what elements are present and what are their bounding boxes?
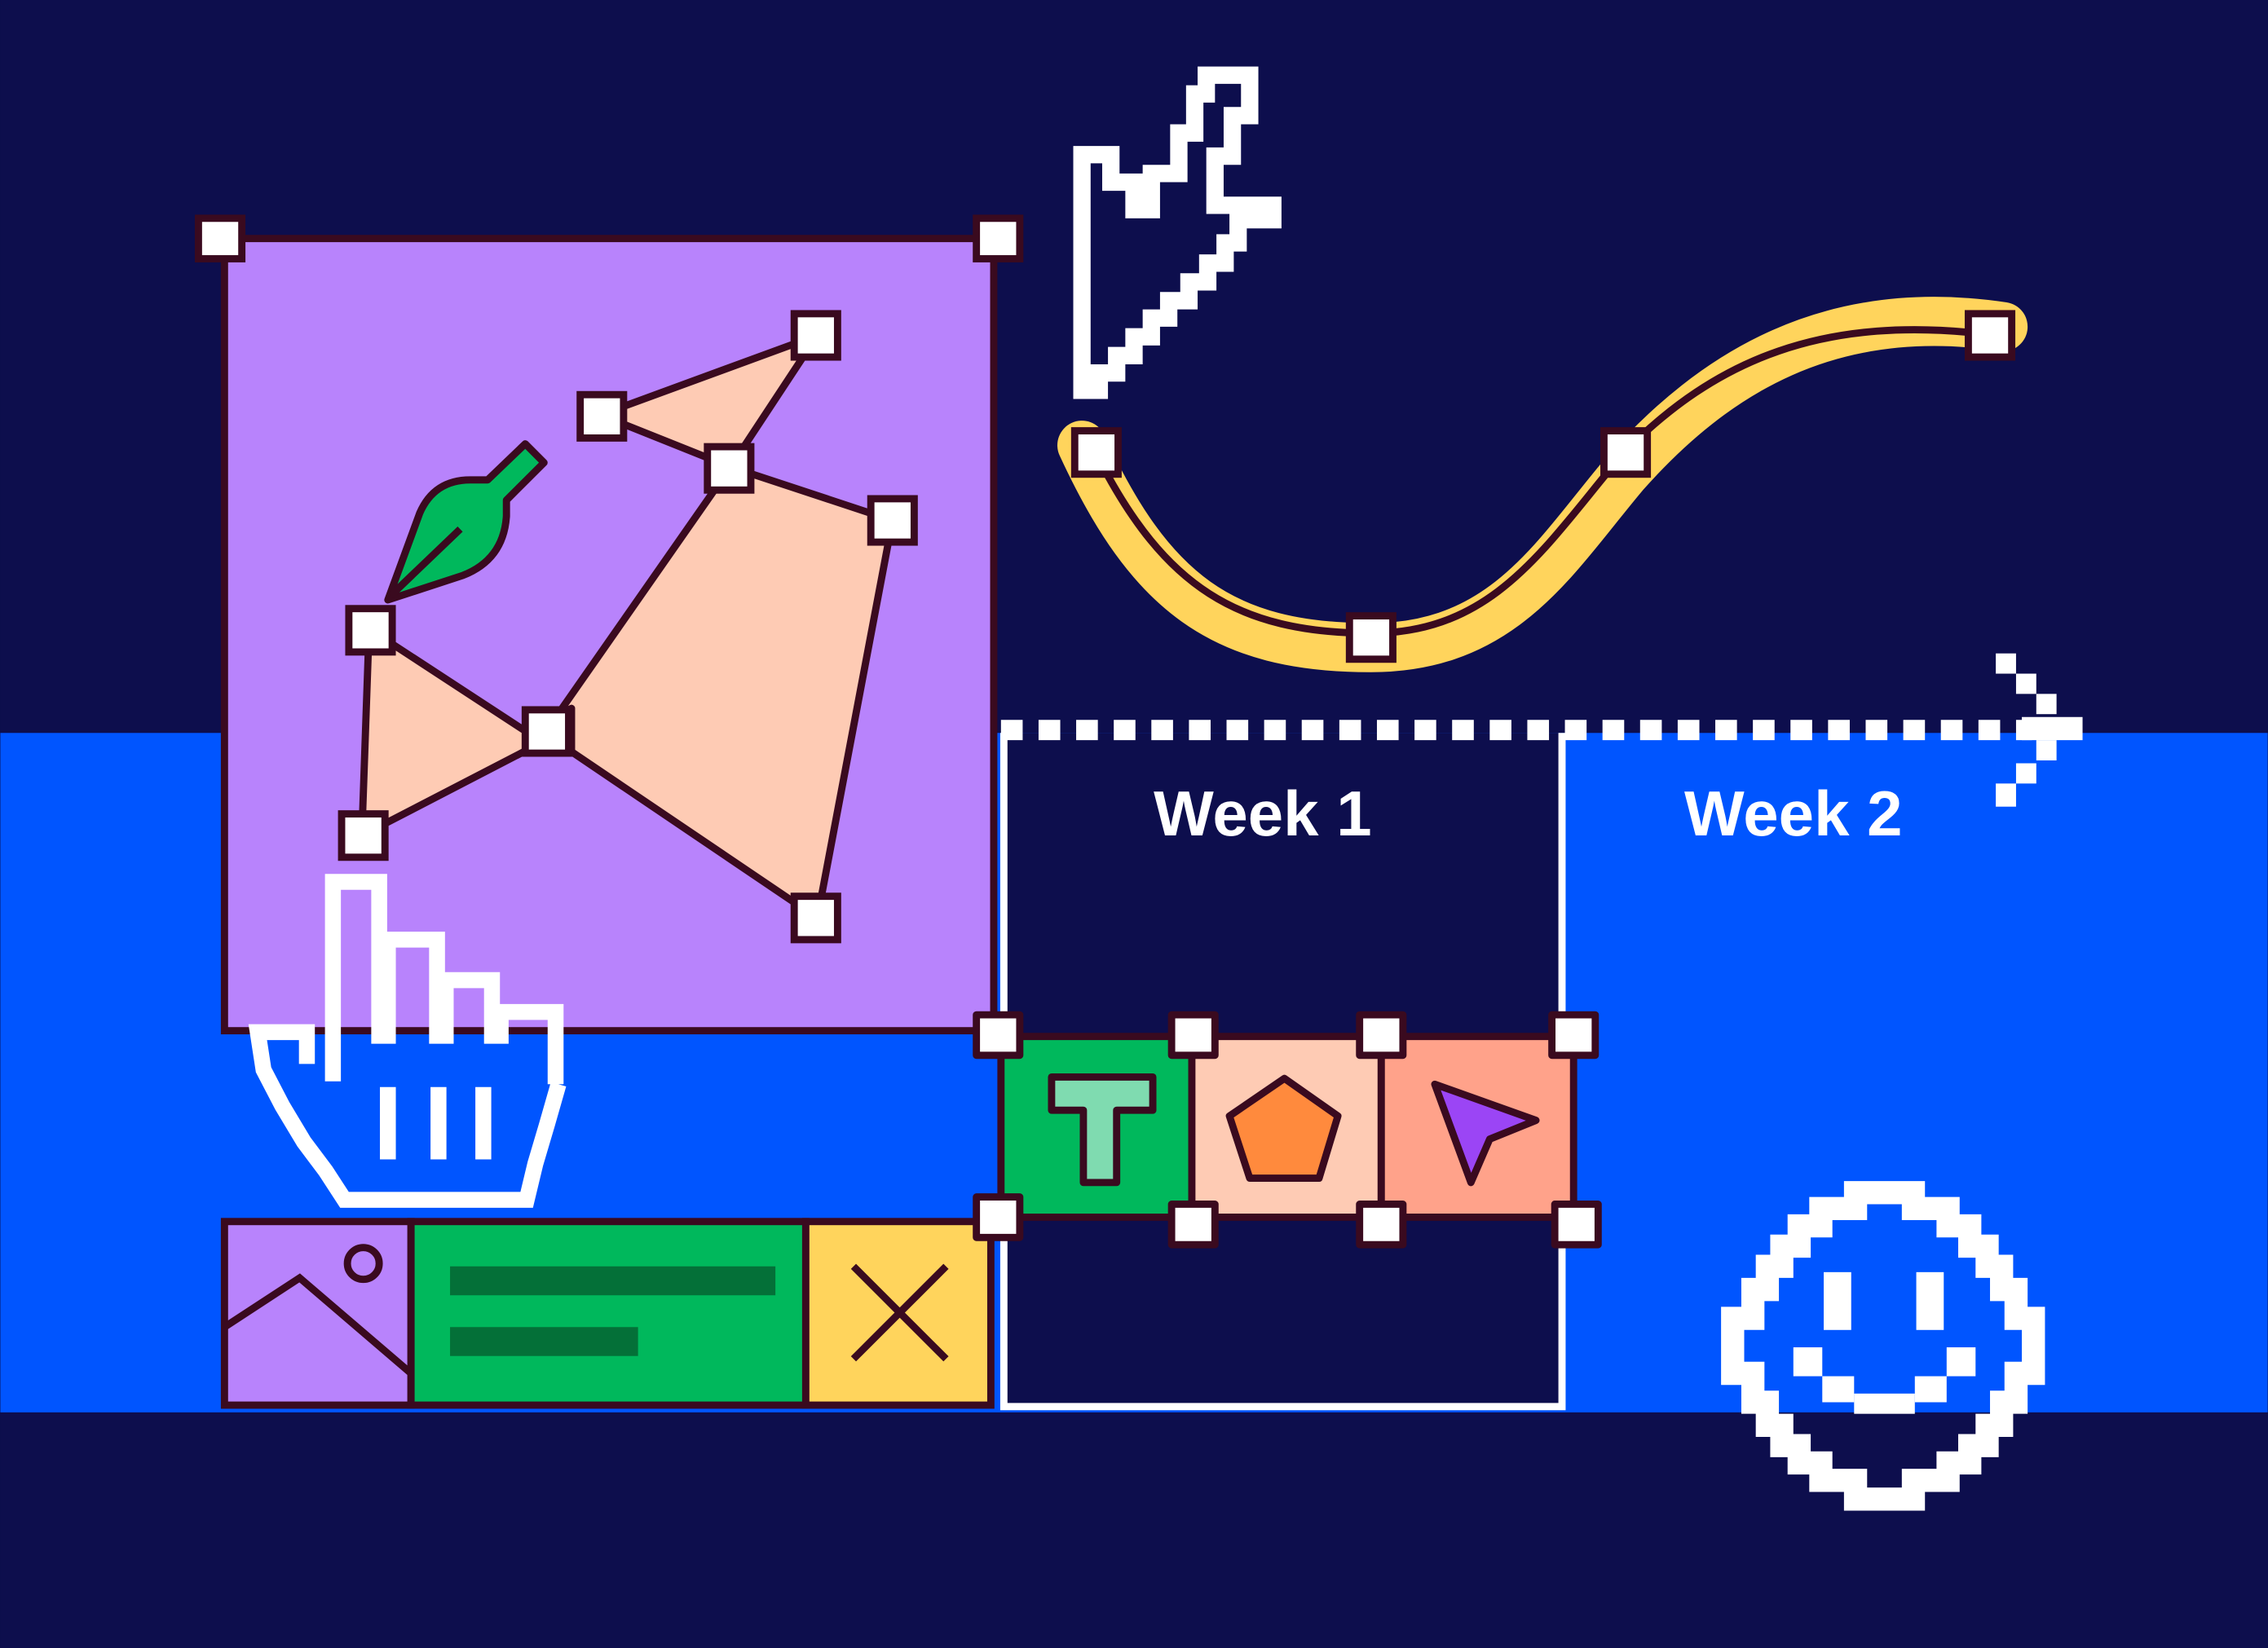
heading: week 2: Week 2 [1684, 778, 1903, 849]
dotted line [1001, 725, 2032, 736]
icon: pen leaf [388, 444, 544, 600]
handles [198, 218, 1020, 940]
icon: cursor [1435, 1084, 1536, 1183]
icon: image [224, 1248, 411, 1373]
icon: pixel cursor [1082, 75, 1273, 390]
panel: purple canvas [198, 218, 1020, 1031]
icon: close x [854, 1267, 946, 1359]
icon: yellow curve [1074, 314, 2012, 659]
panel: tool buttons [977, 1015, 1598, 1245]
icon: pixel hand [258, 882, 558, 1200]
heading: week 1: Week 1 [1154, 778, 1372, 849]
shape: polygons [362, 335, 893, 918]
blue band [0, 733, 2268, 1412]
icon: pixel chevron [1996, 654, 2083, 807]
text lines [450, 1267, 775, 1356]
handles [977, 1015, 1598, 1245]
icon: pentagon [1229, 1078, 1338, 1179]
panel: week 1 [1004, 733, 1562, 1407]
panel: bottom toolbar [224, 1222, 991, 1405]
icon: text T [1052, 1077, 1153, 1183]
icon: pixel smiley [1732, 1192, 2033, 1499]
